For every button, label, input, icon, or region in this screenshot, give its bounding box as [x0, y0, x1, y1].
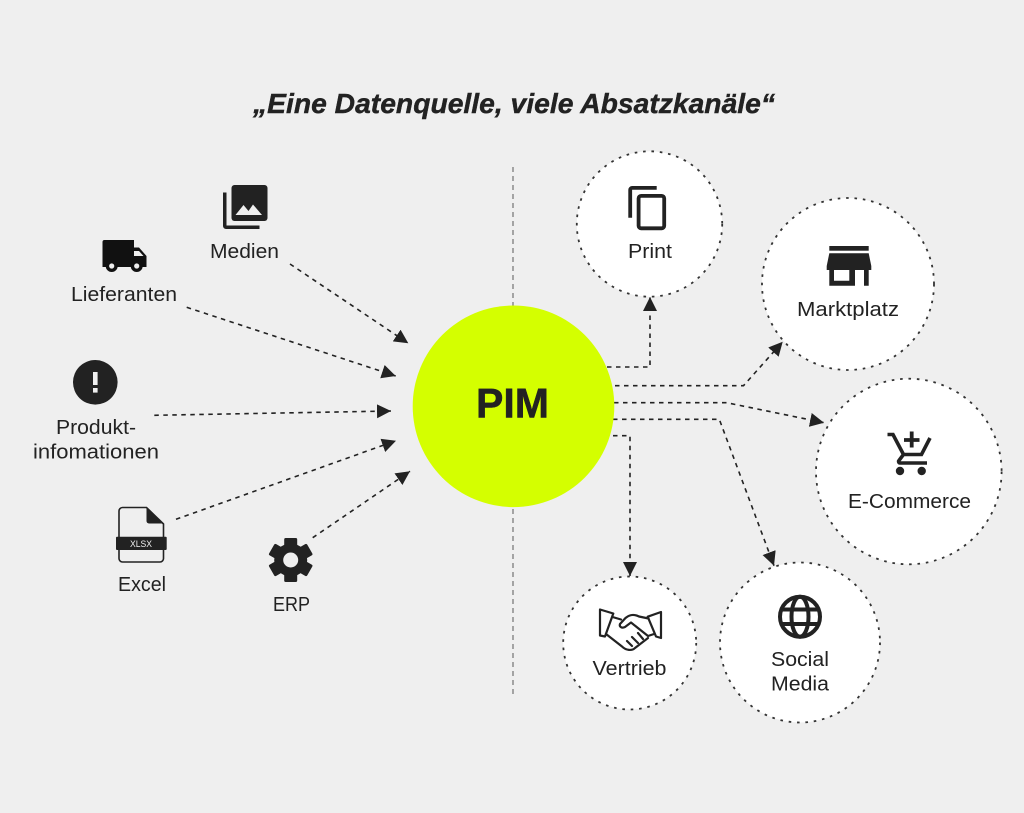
arrow: ERP to PIM	[313, 471, 410, 538]
arrow: Medien to PIM	[290, 264, 408, 343]
label	[771, 649, 830, 696]
label: Media	[771, 674, 830, 696]
channel: Print	[577, 151, 722, 297]
icon: copy	[630, 188, 664, 228]
label	[33, 417, 159, 464]
arrow: PIM to Vertrieb	[613, 436, 630, 576]
arrow: Lieferanten to PIM	[187, 307, 396, 376]
icon: cart	[888, 432, 930, 475]
source: Medien	[210, 185, 279, 263]
icon: globe	[780, 597, 820, 637]
channel: Marktplatz	[762, 198, 934, 370]
title: „Eine Datenquelle, viele Absatzkanäle“	[252, 88, 775, 119]
source: Lieferanten	[71, 240, 177, 306]
icon: gear	[268, 538, 313, 582]
channel: E-Commerce	[816, 379, 1002, 564]
icon: exclamation	[73, 360, 118, 405]
PIM hub	[413, 306, 614, 507]
label: Excel	[118, 574, 166, 596]
icon: images	[223, 185, 268, 229]
arrow: PIM to E-Commerce	[614, 403, 824, 423]
label: Social	[771, 649, 829, 671]
icon: truck	[102, 240, 146, 272]
channel: Vertrieb	[563, 576, 696, 710]
label: Marktplatz	[797, 299, 899, 321]
icon: handshake	[600, 610, 661, 650]
source: ERP	[268, 538, 313, 616]
label: Vertrieb	[592, 658, 666, 680]
label: E-Commerce	[848, 491, 971, 513]
source: Excel	[116, 507, 167, 596]
label: ERP	[273, 594, 310, 616]
arrows: sources to PIM	[154, 264, 410, 538]
label: infomationen	[33, 442, 159, 464]
arrow: Produktinformationen to PIM	[154, 411, 391, 415]
arrow: PIM to Marktplatz	[615, 342, 783, 386]
label: Lieferanten	[71, 284, 177, 306]
label: Produkt-	[56, 417, 136, 439]
label: Medien	[210, 241, 279, 263]
arrow: PIM to Print	[607, 297, 650, 367]
arrow: Excel to PIM	[176, 441, 396, 519]
label: Print	[628, 241, 672, 263]
arrows: PIM to channels	[607, 297, 824, 576]
PIM label: PIM	[476, 380, 549, 426]
arrow: PIM to Social Media	[613, 419, 774, 566]
source: Produktinformationen	[33, 360, 159, 464]
icon: store	[827, 246, 871, 286]
icon: XLSX file: XLSX	[130, 539, 153, 550]
channel: Social Media	[720, 562, 880, 722]
